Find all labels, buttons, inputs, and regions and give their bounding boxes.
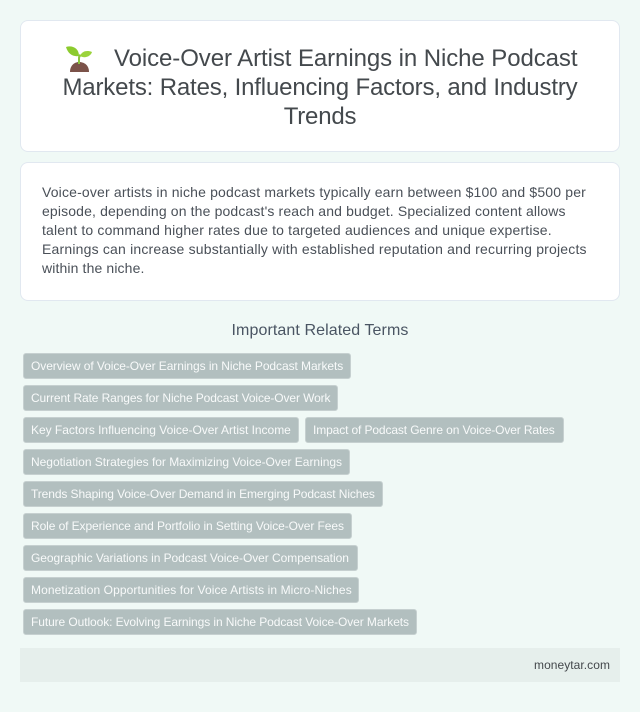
tag bbox=[23, 609, 417, 635]
tag bbox=[23, 385, 338, 411]
tag: Overview of Voice-Over Earnings in Niche Podcast Markets bbox=[31, 359, 343, 373]
tag: Trends Shaping Voice-Over Demand in Emerging Podcast Niches bbox=[31, 487, 375, 501]
tag bbox=[23, 417, 299, 443]
tag bbox=[305, 417, 564, 443]
tag: Future Outlook: Evolving Earnings in Niche Podcast Voice-Over Markets bbox=[31, 615, 409, 629]
icon: seedling bbox=[66, 46, 92, 72]
tag bbox=[23, 481, 383, 507]
tag: Key Factors Influencing Voice-Over Artist Income bbox=[31, 423, 291, 437]
text block: summary: within the niche. bbox=[42, 260, 145, 276]
tag bbox=[23, 545, 358, 571]
text block: summary: talent to command higher rates due to targeted audiences and unique expertise. bbox=[42, 222, 552, 238]
tag bbox=[23, 449, 350, 475]
tag bbox=[23, 577, 359, 603]
tag: Monetization Opportunities for Voice Artists in Micro-Niches bbox=[31, 583, 352, 597]
text block: summary bbox=[42, 184, 587, 276]
text block: summary: episode, depending on the podcast's reach and budget. Specialized content allows bbox=[42, 203, 566, 219]
text block: summary: Earnings can increase substantially with established reputation and recurring projects bbox=[42, 241, 587, 257]
title: Markets: Rates, Influencing Factors, and Industry bbox=[62, 74, 578, 101]
panel: related term tags bbox=[23, 353, 564, 635]
text block: summary: Voice-over artists in niche podcast markets typically earn between $100 and $500 per bbox=[42, 184, 586, 200]
panel: title card bbox=[20, 20, 620, 152]
tag: Impact of Podcast Genre on Voice-Over Rates bbox=[313, 423, 555, 437]
panel: summary card bbox=[20, 162, 620, 301]
tag: Negotiation Strategies for Maximizing Voice-Over Earnings bbox=[31, 455, 342, 469]
title bbox=[62, 45, 578, 130]
footer text: moneytar.com bbox=[534, 658, 610, 672]
tag bbox=[23, 513, 352, 539]
footer bbox=[20, 648, 620, 682]
title: Trends bbox=[284, 103, 356, 130]
tag: Role of Experience and Portfolio in Setting Voice-Over Fees bbox=[31, 519, 344, 533]
tag bbox=[23, 353, 351, 379]
tag: Geographic Variations in Podcast Voice-Over Compensation bbox=[31, 551, 349, 565]
heading: related terms: Important Related Terms bbox=[232, 322, 408, 339]
tag: Current Rate Ranges for Niche Podcast Voice-Over Work bbox=[31, 391, 330, 405]
title: Voice-Over Artist Earnings in Niche Podcast bbox=[114, 45, 577, 72]
